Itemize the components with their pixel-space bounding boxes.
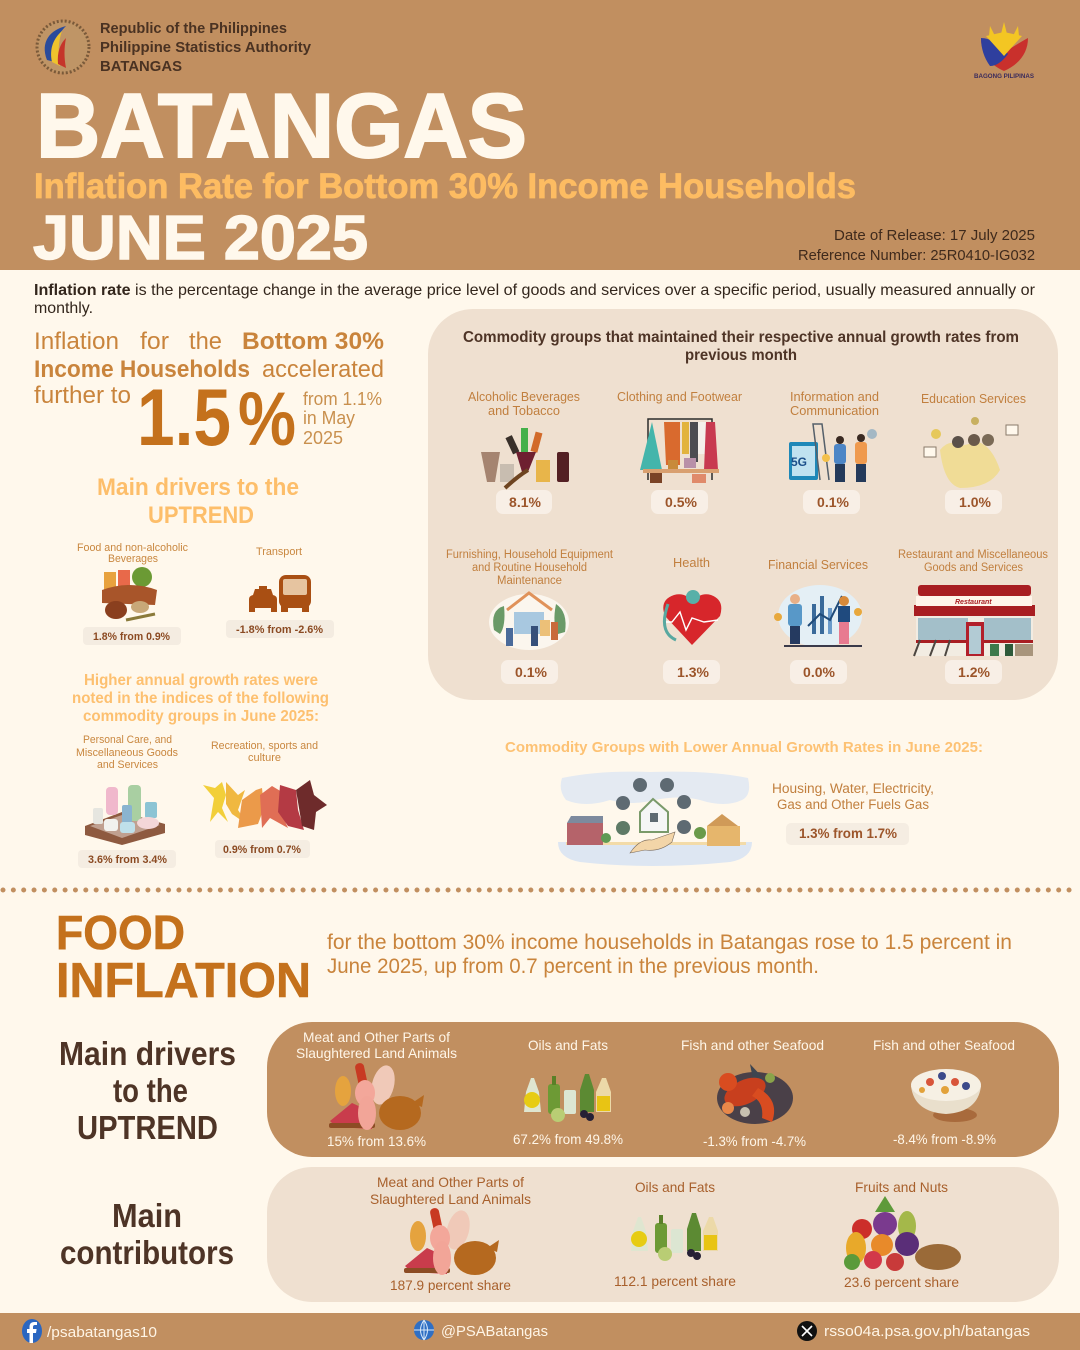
driver: food and non-alcoholic beverages — [77, 542, 188, 645]
icon: 5G tower and people: 5G — [791, 455, 807, 469]
organization name: Republic of the Philippines — [100, 20, 287, 37]
food inflation statement: June 2025, up from 0.7 percent in the previous month. — [327, 955, 819, 978]
item: housing, water, electricity — [772, 781, 934, 845]
previous rate — [303, 389, 382, 448]
driver: oils and fats — [513, 1037, 623, 1147]
contributor: meat: Slaughtered Land Animals — [370, 1191, 531, 1207]
item: furnishing, household equipment: and Routine Household — [472, 562, 587, 574]
period: June 2025: JUNE 2025 — [33, 204, 368, 273]
icon: clothes rack — [640, 419, 719, 483]
heading: higher annual growth rates — [72, 672, 329, 725]
subtitle: Inflation Rate for Bottom 30% Income Households — [34, 167, 856, 206]
heading: main drivers to the uptrend: Main drivers — [59, 1035, 236, 1072]
item: financial services — [768, 558, 868, 684]
icon: bottles and glasses — [481, 428, 569, 488]
release information: Date of Release: 17 July 2025 — [834, 227, 1035, 244]
icon: meat — [404, 1207, 499, 1275]
heading: food inflation: INFLATION — [56, 954, 311, 1008]
icon: cosmetics on a tray — [85, 785, 165, 845]
icon: PSA logo — [37, 21, 89, 73]
panel: main contributors — [267, 1167, 1059, 1302]
value pill: 0.1% — [515, 664, 548, 680]
value pill: 1.0% — [959, 494, 992, 510]
value pill: 1.8% from 0.9% — [93, 631, 170, 643]
item: education services: Education Services — [921, 392, 1026, 406]
icon: household family — [489, 593, 569, 650]
icon: financial analysts and chart — [774, 585, 862, 647]
driver: food and non-alcoholic beverages: Beverages — [108, 553, 158, 565]
release information — [798, 227, 1035, 264]
previous rate: 2025 — [303, 428, 343, 448]
headline statement: 1.5 percent: Inflation — [34, 328, 119, 355]
contributor: meat — [370, 1174, 531, 1293]
icon: sports silhouettes — [203, 780, 327, 830]
icon: oil bottles — [631, 1213, 718, 1261]
value pill — [945, 660, 1002, 684]
value: 23.6 percent share — [844, 1274, 959, 1290]
heading: food inflation: FOOD — [56, 907, 185, 960]
icon: housing and utilities — [558, 772, 752, 866]
heading: food inflation — [56, 907, 311, 1008]
dotted divider — [3, 888, 1078, 892]
panel heading: previous month — [685, 347, 797, 364]
definition of inflation rate: Inflation rate is the percentage change in the average price level of goods and services over a specific period, usually measured annually or — [34, 282, 1036, 299]
previous rate: in May — [303, 408, 355, 428]
item: financial services: Financial Services — [768, 558, 868, 572]
value: 112.1 percent share — [614, 1273, 736, 1289]
value pill: 0.5% — [665, 494, 698, 510]
heading: main drivers to the uptrend: to the — [113, 1072, 188, 1109]
item: information and communication — [789, 390, 879, 514]
headline statement: 1.5 percent: for — [140, 328, 169, 355]
icon: globe — [414, 1320, 434, 1340]
heading: higher annual growth rates: commodity groups in June 2025: — [83, 708, 319, 725]
item: clothing and footwear — [617, 390, 742, 514]
item: furnishing, household equipment — [446, 549, 614, 684]
contributor: fruits and nuts: Fruits and Nuts — [855, 1179, 948, 1195]
driver: transport — [226, 546, 334, 638]
icon: food and drinks — [102, 567, 157, 620]
commodity: personal care: and Services — [97, 759, 158, 771]
icon: oil bottles — [524, 1074, 611, 1122]
commodity: recreation, sports and culture: culture — [248, 752, 281, 764]
icon: cereal bowl — [911, 1069, 981, 1122]
definition of inflation rate — [34, 282, 1036, 317]
value pill: 1.3% — [677, 664, 710, 680]
value pill: -1.8% from -2.6% — [236, 624, 323, 636]
Facebook handle: /psabatangas10 — [47, 1324, 157, 1341]
heading: main drivers — [97, 474, 299, 529]
icon: Bagong Pilipinas logo — [974, 22, 1034, 80]
driver: oils and fats: Oils and Fats — [528, 1037, 608, 1053]
value: 67.2% from 49.8% — [513, 1131, 623, 1147]
panel: commodity groups that maintained growth — [428, 309, 1058, 700]
organization name: Philippine Statistics Authority — [100, 39, 312, 56]
food inflation statement — [327, 931, 1012, 978]
item: clothing and footwear: Clothing and Footwear — [617, 390, 742, 404]
driver: transport: Transport — [256, 546, 302, 558]
heading: main drivers: UPTREND — [148, 502, 254, 529]
item: education services — [921, 392, 1026, 514]
icon: Facebook — [22, 1319, 42, 1343]
value: 187.9 percent share — [390, 1277, 511, 1293]
commodity: recreation, sports and culture: Recreation, sports and — [211, 740, 318, 752]
header band — [0, 0, 1080, 273]
panel heading: Commodity groups that maintained their respective annual growth rates from — [463, 329, 1019, 346]
commodity: personal care: Miscellaneous Goods — [76, 747, 178, 759]
title: Batangas: BATANGAS — [36, 76, 527, 177]
item: health — [663, 556, 721, 684]
driver: fish and other seafood — [681, 1037, 824, 1149]
item: housing, water, electricity: Gas and Other Fuels Gas — [777, 797, 929, 812]
headline statement: 1.5 percent: Bottom 30% — [242, 328, 384, 355]
heading: higher annual growth rates: Higher annual growth rates were — [84, 672, 318, 689]
headline statement: 1.5 percent: the — [189, 328, 222, 355]
value pill: 1.2% — [958, 664, 991, 680]
headline statement: 1.5 percent: further to — [34, 382, 131, 409]
contributor: fruits and nuts — [844, 1179, 961, 1290]
figure: 1.5 percent: 1.5 — [137, 373, 231, 463]
food inflation statement: for the bottom 30% income households in Batangas rose to 1.5 percent in — [327, 931, 1012, 954]
driver: meat: Meat and Other Parts of — [303, 1029, 450, 1045]
driver: meat: Slaughtered Land Animals — [296, 1045, 457, 1061]
figure: 1.5 percent: % — [238, 377, 296, 462]
heading: main drivers: Main drivers to the — [97, 474, 299, 501]
headline statement: 1.5 percent: accelerated — [262, 356, 384, 383]
heading: lower annual growth rates: Commodity Groups with Lower Annual Growth Rates in June 2025: — [505, 739, 983, 756]
icon: fruits and nuts — [844, 1196, 961, 1271]
item: furnishing, household equipment: Furnishing, Household Equipment — [446, 549, 614, 561]
icon: restaurant building — [914, 585, 1035, 656]
value pill: 3.6% from 3.4% — [88, 854, 167, 866]
value pill — [786, 823, 909, 845]
item: restaurant and miscellaneous goods: Restaurant and Miscellaneous — [898, 549, 1048, 561]
previous rate: from 1.1% — [303, 389, 382, 409]
value pill: 0.0% — [803, 664, 836, 680]
icon: taxi and bus — [249, 575, 311, 612]
driver: food and non-alcoholic beverages: Food and non-alcoholic — [77, 542, 188, 554]
value: -1.3% from -4.7% — [703, 1133, 806, 1149]
panel heading — [463, 329, 1019, 364]
footer band — [0, 1313, 1080, 1350]
headline statement: 1.5 percent — [34, 328, 384, 463]
icon: meat — [329, 1062, 424, 1130]
value: -8.4% from -8.9% — [893, 1131, 996, 1147]
contributor: meat: Meat and Other Parts of — [377, 1174, 524, 1190]
item: alcoholic beverages and tobacco — [468, 390, 580, 514]
item: restaurant and miscellaneous goods: Goods and Services — [924, 562, 1023, 574]
item: health: Health — [673, 556, 710, 570]
value: 15% from 13.6% — [327, 1133, 426, 1149]
icon: X — [797, 1321, 817, 1341]
website handle: @PSABatangas — [441, 1323, 548, 1340]
driver: fish and other seafood: Fish and other Seafood — [681, 1037, 824, 1053]
driver: cereals: Fish and other Seafood — [873, 1037, 1015, 1053]
heading: main contributors: contributors — [60, 1234, 234, 1271]
heading: main drivers to the uptrend — [59, 1035, 236, 1146]
item: information and communication: Information and — [790, 390, 879, 404]
value pill: 0.1% — [817, 494, 850, 510]
icon: seafood — [717, 1064, 793, 1124]
contributor: oils and fats — [614, 1179, 736, 1289]
icon: restaurant building: Restaurant — [955, 599, 992, 606]
icon: Bagong Pilipinas logo: BAGONG PILIPINAS — [974, 74, 1034, 80]
heading: main drivers to the uptrend: UPTREND — [77, 1109, 218, 1146]
value pill — [501, 660, 558, 684]
item: housing, water, electricity: Housing, Water, Electricity, — [772, 781, 934, 796]
driver: meat — [296, 1029, 457, 1149]
panel: main drivers to the uptrend — [267, 1022, 1059, 1157]
heading: higher annual growth rates: noted in the indices of the following — [72, 690, 329, 707]
definition of inflation rate: monthly. — [34, 300, 93, 317]
website address: rsso04a.psa.gov.ph/batangas — [824, 1323, 1030, 1340]
release information: Reference Number: 25R0410-IG032 — [798, 247, 1035, 264]
item: information and communication: Communication — [790, 404, 879, 418]
organization name: BATANGAS — [100, 58, 182, 75]
driver: cereals — [873, 1037, 1015, 1147]
item: alcoholic beverages and tobacco: and Tobacco — [488, 404, 560, 418]
icon: students studying — [924, 417, 1018, 488]
item: restaurant and miscellaneous goods — [898, 549, 1048, 684]
icon: heart with stethoscope — [663, 590, 721, 645]
heading: main contributors — [60, 1197, 234, 1271]
value pill: 8.1% — [509, 494, 542, 510]
commodity: personal care — [76, 734, 178, 868]
headline statement: 1.5 percent: Income Households — [34, 356, 250, 383]
contributor: oils and fats: Oils and Fats — [635, 1179, 715, 1195]
value pill: 1.3% from 1.7% — [799, 825, 898, 841]
item: furnishing, household equipment: Maintenance — [497, 575, 562, 587]
item: alcoholic beverages and tobacco: Alcoholic Beverages — [468, 390, 580, 404]
organization name — [100, 20, 312, 75]
value pill: 0.9% from 0.7% — [223, 844, 301, 856]
commodity: recreation, sports and culture — [203, 740, 327, 858]
commodity: personal care: Personal Care, and — [83, 734, 172, 746]
heading: main contributors: Main — [112, 1197, 182, 1234]
